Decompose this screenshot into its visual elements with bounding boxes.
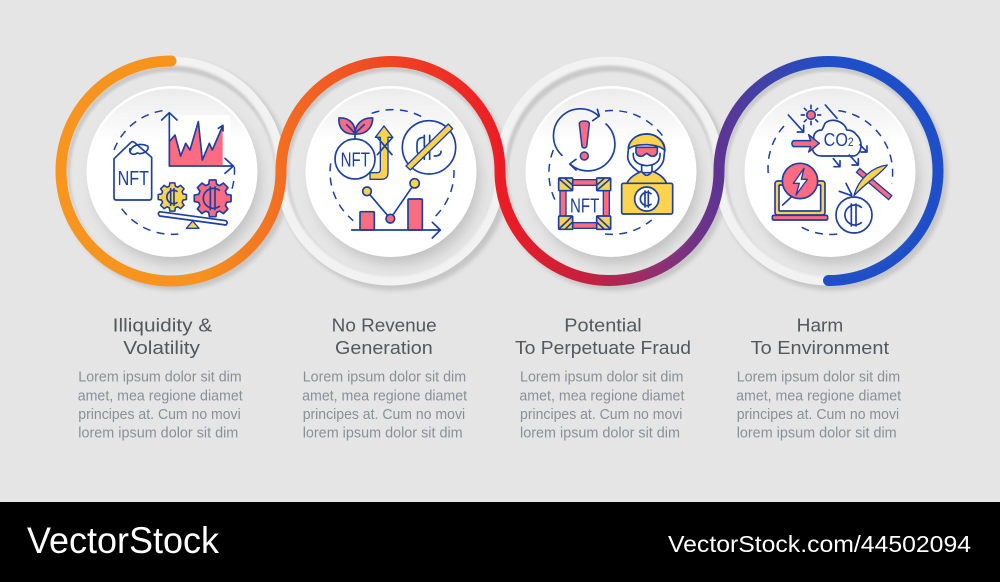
base ring: step 4 [714,56,948,290]
body text: step 3: amet, mea regione diamet [519,388,684,404]
heading: no revenue generation: No Revenue [332,314,437,336]
heading: potential to perpetuate fraud: To Perpetuate Fraud [515,337,691,358]
body text: step 2: amet, mea regione diamet [302,388,467,404]
body text: step 3: principes at. Cum no movi [520,407,682,423]
icon: no revenue generation [330,110,456,238]
disc: step 1 [86,86,260,264]
disc: step 2 [306,86,479,264]
heading: illiquidity and volatility: Illiquidity & [113,314,213,336]
body text: step 1: lorem ipsum dolor sit dim [78,425,238,441]
heading: harm to environment: To Environment [751,337,889,358]
icon: illiquidity and volatility: NFT [118,167,149,190]
text column: potential to perpetuate fraud [515,314,691,441]
heading: harm to environment: Harm [797,314,843,336]
body text: step 2: lorem ipsum dolor sit dim [303,425,463,441]
body text: step 3: Lorem ipsum dolor sit dim [520,370,683,386]
heading: illiquidity and volatility [113,314,213,358]
base ring: step 1 [56,56,290,290]
corner: top right [597,178,611,191]
gradient ribbon connecting all steps [61,61,938,281]
heading: no revenue generation: Generation [335,337,433,358]
body text: step 4: lorem ipsum dolor sit dim [737,425,897,441]
footer bar [0,502,1000,582]
body text: step 4: amet, mea regione diamet [736,388,901,404]
base ring: step 3 [495,56,729,290]
heading: harm to environment [751,314,889,358]
corner: bottom right [597,216,611,229]
text column: illiquidity and volatility [78,314,243,441]
base ring: step 2 [276,56,510,290]
body text: step 2 [302,370,467,441]
icon: potential to perpetuate fraud [549,109,673,234]
body text: step 4: Lorem ipsum dolor sit dim [737,370,900,386]
text column: no revenue generation [302,314,467,441]
icon: potential to perpetuate fraud: NFT [570,194,600,217]
body text: step 1 [78,370,243,441]
text column: harm to environment [736,314,901,441]
body text: step 1: principes at. Cum no movi [78,407,241,423]
heading: illiquidity and volatility: Volatility [123,337,201,358]
heading: potential to perpetuate fraud: Potential [564,314,642,336]
heading: no revenue generation [332,314,437,358]
corner: top left [559,178,573,191]
disc: step 4 [744,86,918,264]
footer logo text: VectorStock [27,520,219,561]
body text: step 4: principes at. Cum no movi [737,407,899,423]
body text: step 1: Lorem ipsum dolor sit dim [78,370,242,386]
body text: step 2: principes at. Cum no movi [303,407,465,423]
icon: no revenue generation: NFT [341,149,370,172]
body text: step 3: lorem ipsum dolor sit dim [520,425,680,441]
icon: illiquidity and volatility [114,111,235,234]
footer url text: VectorStock.com/44502094 [668,531,971,557]
body text: step 4 [736,370,901,441]
body text: step 1: amet, mea regione diamet [78,388,243,404]
icon: harm to environment [768,105,893,234]
body text: step 3 [519,370,684,441]
heading: potential to perpetuate fraud [515,314,691,358]
body text: step 2: Lorem ipsum dolor sit dim [303,370,466,386]
icon: harm to environment: CO2 [824,129,854,150]
corner: bottom left [559,216,573,229]
disc: step 3 [526,86,699,264]
